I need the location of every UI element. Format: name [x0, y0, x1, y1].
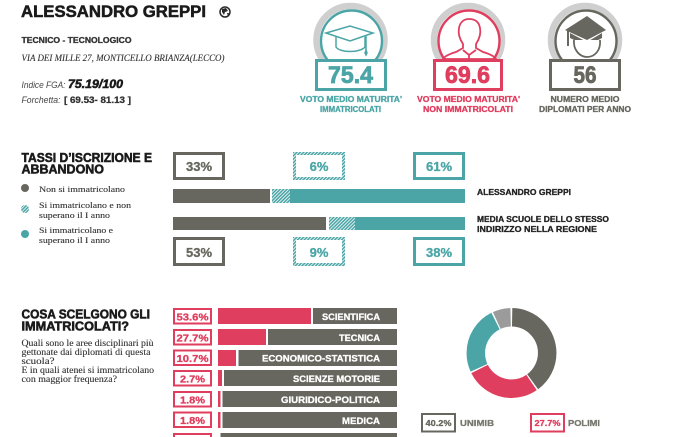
- row: giuridico-politica: 1.8%: [180, 394, 206, 406]
- legend: enrolment: superano il I anno: [39, 210, 110, 220]
- icon: globe: [220, 7, 230, 17]
- icon: graduation cap: [326, 26, 373, 55]
- text block: description: [22, 338, 155, 384]
- legend: unimib: [422, 414, 494, 432]
- legend: enrolment: [21, 184, 132, 245]
- FGA range: Forchetta:: [22, 95, 61, 105]
- bar labels: INDIRIZZO NELLA REGIONE: [477, 224, 597, 234]
- stat: numero medio diplomati: 56: [574, 62, 596, 89]
- text block: description: scuola?: [22, 356, 54, 366]
- row: scienze motorie: [174, 370, 397, 386]
- bar labels: ALESSANDRO GREPPI: [477, 187, 571, 197]
- text block: description: con maggior frequenza?: [22, 374, 117, 384]
- stat: voto medio immatricolati: IMMATRICOLATI: [320, 105, 381, 114]
- heading: tassi di iscrizione: ABBANDONO: [22, 162, 104, 176]
- legend: polimi: [531, 414, 600, 432]
- legend: polimi: POLIMI: [568, 418, 600, 428]
- heading: tassi di iscrizione: TASSI D’ISCRIZIONE E: [22, 151, 152, 165]
- stat: voto medio immatricolati: VOTO MEDIO MATURITA': [300, 95, 402, 104]
- bar: school: [173, 189, 465, 203]
- row: giuridico-politica: GIURIDICO-POLITICA: [281, 395, 380, 406]
- chart: disciplinary areas: [174, 308, 397, 437]
- heading: cosa scelgono: [22, 308, 150, 334]
- legend: enrolment: superano il I anno: [39, 235, 110, 245]
- address: VIA DEI MILLE 27, MONTICELLO BRIANZA(LECCO): [22, 53, 224, 63]
- heading: cosa scelgono: COSA SCELGONO GLI: [22, 308, 150, 322]
- row: scientifica: [174, 308, 397, 324]
- stat: voto medio immatricolati: [300, 6, 402, 114]
- text block: description: gettonate dai diplomati di questa: [22, 347, 150, 357]
- row: economico-statistica: ECONOMICO-STATISTICA: [262, 354, 380, 364]
- bottom percentage boxes: 38%: [426, 245, 452, 260]
- stat: voto medio non immatricolati: VOTO MEDIO MATURITA': [417, 95, 520, 104]
- row: economico-statistica: [174, 350, 397, 366]
- header: school details: [21, 2, 230, 105]
- stat: voto medio non immatricolati: NON IMMATRICOLATI: [423, 105, 513, 114]
- row: cropped last row: [174, 433, 397, 437]
- top percentage boxes: [174, 154, 464, 178]
- bar labels: MEDIA SCUOLE DELLO STESSO: [477, 214, 609, 224]
- stat: voto medio immatricolati: 75.4: [328, 62, 374, 89]
- legend: enrolment: Si immatricolano e: [39, 225, 113, 235]
- icon: graduate: [565, 16, 606, 57]
- row: tecnica: [174, 329, 397, 345]
- FGA index: Indice FGA:: [22, 80, 66, 90]
- legend: unimib: UNIMIB: [460, 418, 494, 428]
- row: medica: [174, 412, 397, 428]
- text block: description: E in quali atenei si immatricolano: [22, 365, 155, 375]
- top percentage boxes: 61%: [426, 159, 452, 174]
- title: ALESSANDRO GREPPI: [21, 2, 206, 21]
- FGA range: [22, 95, 131, 105]
- legend: unimib: 40.2%: [426, 418, 452, 428]
- donut chart: universities: [476, 317, 547, 389]
- bottom percentage boxes: [174, 238, 464, 264]
- row: medica: MEDICA: [342, 416, 380, 427]
- bar: regional average: [173, 217, 465, 230]
- stat: voto medio non immatricolati: 69.6: [445, 62, 490, 89]
- FGA index: [22, 79, 124, 91]
- legend: enrolment: Non si immatricolano: [39, 184, 125, 194]
- row: scientifica: SCIENTIFICA: [322, 312, 380, 323]
- row: medica: 1.8%: [180, 415, 206, 427]
- text block: description: Quali sono le aree disciplinari più: [22, 338, 154, 348]
- icon: person: [443, 19, 496, 59]
- chart: enrolment stacked bars: [173, 154, 609, 264]
- row: economico-statistica: 10.7%: [176, 353, 209, 365]
- top percentage boxes: 6%: [310, 159, 329, 174]
- bar labels: [477, 187, 609, 234]
- row: tecnica: 27.7%: [176, 332, 209, 344]
- stat: numero medio diplomati: DIPLOMATI PER ANNO: [539, 105, 631, 114]
- stat: numero medio diplomati: NUMERO MEDIO: [550, 95, 620, 104]
- top percentage boxes: 33%: [186, 159, 212, 174]
- heading: tassi di iscrizione: [22, 151, 152, 176]
- legend: enrolment: Si immatricolano e non: [39, 200, 132, 210]
- row: giuridico-politica: [174, 391, 397, 407]
- bottom percentage boxes: 53%: [186, 245, 212, 260]
- bottom percentage boxes: 9%: [310, 245, 329, 260]
- legend: polimi: 27.7%: [534, 418, 561, 428]
- row: scienze motorie: SCIENZE MOTORIE: [293, 374, 380, 385]
- row: scientifica: 53.6%: [176, 312, 209, 324]
- heading: cosa scelgono: IMMATRICOLATI?: [22, 320, 129, 334]
- school type: TECNICO - TECNOLOGICO: [22, 36, 132, 45]
- FGA range: [ 69.53- 81.13 ]: [64, 95, 131, 105]
- stat: numero medio diplomati: [539, 6, 631, 114]
- row: tecnica: TECNICA: [339, 333, 380, 344]
- stat: voto medio non immatricolati: [417, 6, 520, 114]
- FGA index: 75.19/100: [68, 79, 124, 91]
- row: scienze motorie: 2.7%: [180, 374, 206, 386]
